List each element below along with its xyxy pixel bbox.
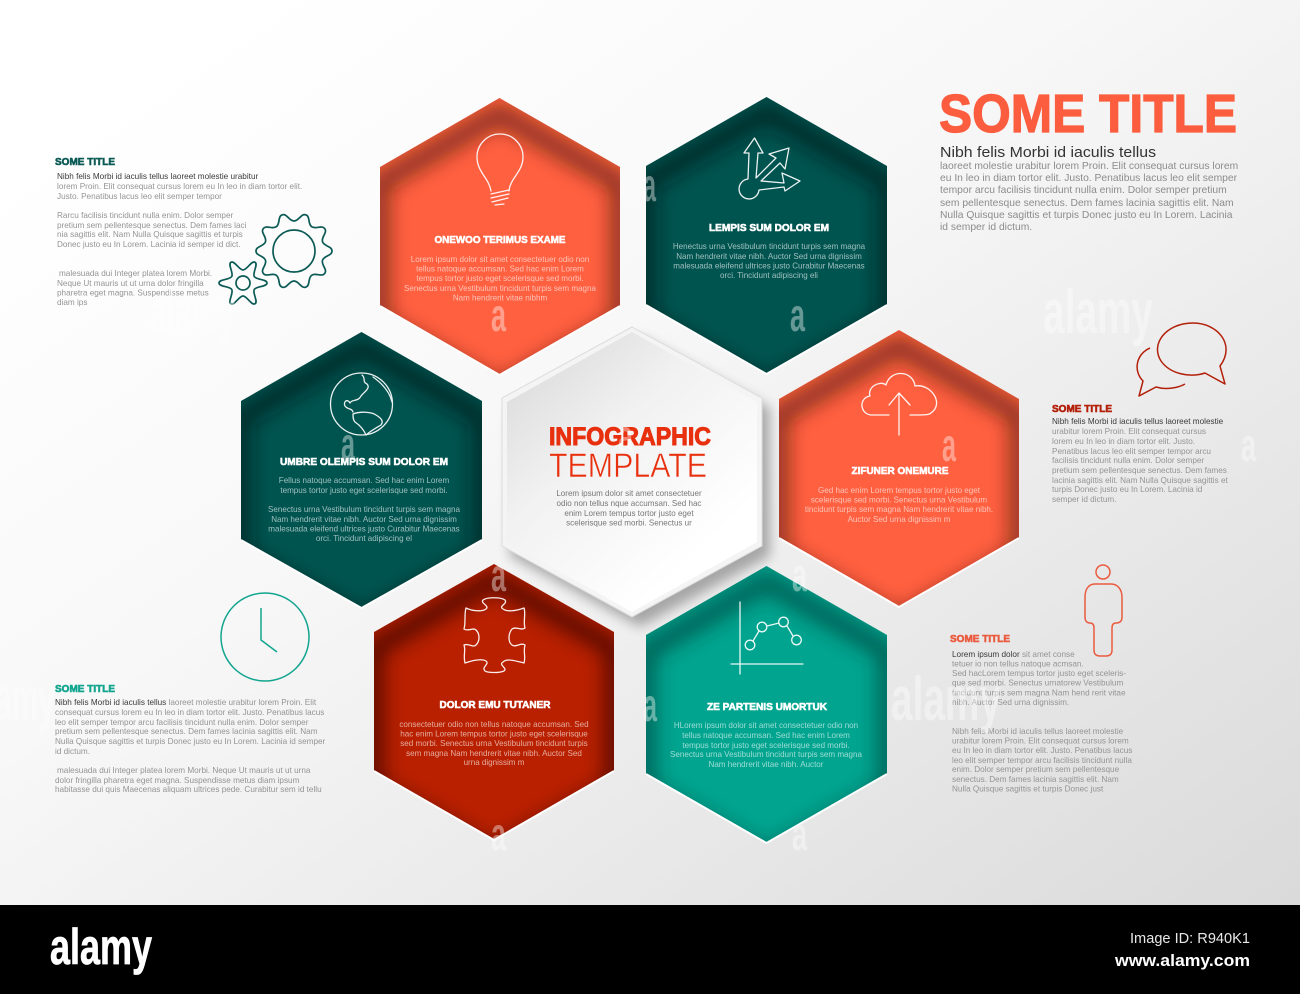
side block: bottom left: dolor fringilla pharetra eget magna. Suspendisse metus diam ipsum bbox=[55, 776, 300, 785]
icon: person bbox=[1085, 565, 1122, 656]
side block: top left: nia sagittis elit. Nam Nulla Quisque sagittis et turpis bbox=[57, 230, 243, 239]
side block: bottom right bbox=[950, 633, 1132, 794]
text block: ze partenis: tellus natoque accumsan. Sed hac enim Lorem bbox=[682, 731, 850, 740]
text block: umbre: Fellus natoque accumsan. Sed hac enim Lorem bbox=[279, 476, 450, 485]
icon: speech bubbles bbox=[1137, 323, 1226, 396]
watermarks: alamy bbox=[1043, 278, 1153, 347]
watermarks: a bbox=[491, 289, 506, 341]
side block: right: turpis Donec justo eu In Lorem. Lacinia id bbox=[1052, 485, 1203, 494]
center heading: INFOGRAPHIC bbox=[549, 423, 711, 451]
side block: bottom left: Nibh felis Morbi id iaculis tellus laoreet molestie urabitur lorem Proin. Elit bbox=[55, 698, 316, 707]
text block: zifuner: scelerisque sed morbi. Senectus urna Vestibulum bbox=[811, 496, 987, 504]
side block: top left: lorem Proin. Elit consequat cursus lorem eu In leo in diam tortor elit. bbox=[57, 182, 302, 191]
side block: bottom left: SOME TITLE bbox=[55, 683, 115, 695]
heading: zifuner: ZIFUNER ONEMURE bbox=[852, 465, 948, 477]
side block: bottom left: pretium sem pellentesque senectus. Dem fames lacinia sagittis elit. Nam bbox=[55, 727, 318, 736]
watermarks: a bbox=[618, 410, 633, 462]
center hexagon panel bbox=[502, 327, 770, 627]
side block: bottom right: eu In leo in diam tortor elit. Justo. Penatibus lacus bbox=[952, 746, 1132, 755]
side block: right: lacinia sagittis elit. Nam Nulla Quisque sagittis et bbox=[1052, 476, 1229, 485]
side block: right: facilisis tincidunt nulla enim. Dolor semper bbox=[1052, 456, 1204, 465]
watermarks: alamy bbox=[150, 278, 235, 347]
side block: bottom right: nibh. Auctor Sed urna dignissim. bbox=[952, 698, 1069, 707]
icon: clock bbox=[221, 593, 309, 681]
main title block: Nulla Quisque sagittis et turpis Donec justo eu In Lorem. Lacinia bbox=[940, 210, 1233, 221]
watermarks: a bbox=[792, 808, 807, 860]
watermarks: a bbox=[942, 419, 956, 471]
watermarks: a bbox=[491, 549, 506, 601]
side block: top left: Neque Ut mauris ut ut urna dolor fringilla bbox=[57, 279, 204, 288]
side block: bottom left: Nulla Quisque sagittis et turpis Donec justo eu In Lorem. Lacinia id semper bbox=[55, 737, 326, 746]
main title block: SOME TITLE bbox=[939, 84, 1237, 144]
side block: right bbox=[1052, 403, 1229, 504]
text block: dolor: hac enim Lorem tempus tortor justo eget scelerisque bbox=[400, 730, 588, 738]
center text block: Lorem ipsum dolor sit amet consectetuer bbox=[556, 489, 702, 498]
side block: bottom left: habitasse dui quis Maecenas aliquam ultrices pede. Curabitur sem id tellu bbox=[55, 785, 322, 794]
side block: bottom left: id dictum. bbox=[55, 747, 90, 756]
text block: umbre: Senectus urna Vestibulum tincidunt turpis sem magna bbox=[268, 505, 460, 514]
side block: right: lorem eu In leo in diam tortor elit. Justo. bbox=[1052, 437, 1195, 446]
icon: line chart bbox=[731, 602, 803, 674]
side block: top left: Rarcu facilisis tincidunt nulla enim. Dolor semper bbox=[57, 211, 233, 220]
watermarks: a bbox=[1241, 419, 1256, 471]
text block: umbre: tempus tortor justo eget scelerisque sed morbi. bbox=[280, 486, 448, 495]
main title block: id semper id dictum. bbox=[940, 222, 1032, 233]
icon: diverging arrows bbox=[739, 138, 800, 199]
center heading bbox=[549, 423, 711, 485]
footer bar bbox=[0, 905, 1300, 994]
side block: bottom right: urabitur lorem Proin. Elit consequat cursus lorem bbox=[952, 736, 1129, 746]
hexagon panel: light bulb bbox=[380, 98, 620, 391]
text block: onewoo: Nam hendrerit vitae nibhm bbox=[453, 294, 547, 302]
side block: bottom right: leo elit semper tempor arcu facilisis tincidunt nulla bbox=[952, 756, 1132, 765]
text block: ze partenis: Nam hendrerit vitae nibh. Auctor bbox=[709, 760, 824, 769]
icon: puzzle piece bbox=[464, 598, 525, 672]
side block: bottom right: senectus. Dem fames lacinia sagittis elit. Nam bbox=[952, 775, 1119, 784]
heading: ze partenis: ZE PARTENIS UMORTUK bbox=[707, 701, 827, 713]
side block: top left: diam ips bbox=[57, 298, 87, 307]
text block: umbre: Nam hendrerit vitae nibh. Auctor Sed urna dignissim bbox=[271, 515, 457, 524]
side block: bottom left bbox=[55, 683, 326, 794]
main title block: eu In leo in diam tortor elit. Justo. Penatibus lacus leo elit semper bbox=[940, 173, 1238, 184]
text block: ze partenis: Senectus urna Vestibulum tincidunt turpis sem magna bbox=[670, 750, 862, 759]
side block: bottom left: consequat cursus lorem eu In leo in diam tortor elit. Justo. Penatibus lacus bbox=[55, 708, 324, 717]
side block: top left bbox=[55, 156, 302, 307]
icon: gears bbox=[219, 215, 332, 304]
text block: ze partenis: HLorem ipsum dolor sit amet consectetuer odio non bbox=[674, 721, 858, 730]
text block: onewoo: tempus tortor justo eget scelerisque sed morbi. bbox=[416, 274, 584, 283]
text block: onewoo: tellus natoque accumsan. Sed hac enim Lorem bbox=[416, 264, 584, 274]
side block: bottom right: que sed morbi. Senectus urnatorew Vestibulum bbox=[952, 679, 1123, 688]
watermarks: alamy bbox=[891, 665, 1001, 734]
side block: top left: Justo. Penatibus lacus leo elit semper tempor bbox=[57, 192, 222, 201]
text block: dolor: sem magna Nam hendrerit vitae nibh. Auctor Sed bbox=[406, 749, 582, 758]
watermarks: a bbox=[790, 289, 805, 341]
center text block: scelerisque sed morbi. Senectus ur bbox=[566, 518, 692, 528]
side block: bottom right: Lorem ipsum dolor sit amet conse bbox=[952, 650, 1075, 659]
text block: lempis: malesuada eleifend ultrices justo Curabitur Maecenas bbox=[673, 262, 865, 270]
side block: top left: SOME TITLE bbox=[55, 156, 115, 168]
heading: lempis: LEMPIS SUM DOLOR EM bbox=[709, 222, 829, 234]
side block: top left: Nibh felis Morbi id iaculis tellus laoreet molestie urabitur bbox=[57, 172, 258, 181]
text block: lempis: Henectus urna Vestibulum tincidunt turpis sem magna bbox=[673, 242, 866, 251]
text block: dolor: urna dignissim m bbox=[464, 758, 525, 767]
side block: bottom left: leo elit semper tempor arcu facilisis tincidunt nulla enim. Dolor semper bbox=[55, 718, 309, 727]
side block: bottom right: Nulla Quisque sagittis et turpis Donec just bbox=[952, 784, 1104, 794]
heading: onewoo: ONEWOO TERIMUS EXAME bbox=[434, 234, 566, 246]
text block: lempis: orci. Tincidunt adipiscing eli bbox=[720, 271, 818, 280]
watermarks: a bbox=[643, 159, 656, 211]
main title block: sem pellentesque senectus. Dem fames lacinia sagittis elit. Nam bbox=[940, 198, 1234, 209]
side block: right: Penatibus lacus leo elit semper tempor arcu bbox=[1052, 447, 1211, 456]
center text block: enim Lorem tempus tortor justo eget bbox=[564, 509, 694, 518]
heading: dolor: DOLOR EMU TUTANER bbox=[440, 699, 551, 711]
side block: bottom right: enim. Dolor semper pretium sem pellentesque bbox=[952, 765, 1120, 774]
side block: right: urabitur lorem Proin. Elit consequat cursus bbox=[1052, 427, 1206, 436]
side block: right: semper id dictum. bbox=[1052, 495, 1116, 504]
side block: bottom right: tetuer io non tellus natoque acmsan. bbox=[952, 660, 1084, 668]
text block: zifuner: tincidunt turpis sem magna Nam hendrerit vitae nibh. bbox=[805, 505, 993, 514]
watermarks: a bbox=[792, 549, 807, 601]
text block: ze partenis: tempus tortor justo eget scelerisque sed morbi. bbox=[682, 741, 850, 750]
side block: top left: pharetra eget magna. Suspendisse metus bbox=[57, 288, 209, 298]
footer url: www.alamy.com bbox=[1114, 951, 1250, 970]
footer image id: Image ID: R940K1 bbox=[1130, 930, 1250, 947]
side block: right: SOME TITLE bbox=[1052, 403, 1112, 415]
text block: onewoo: Senectus urna Vestibulum tincidunt turpis sem magna bbox=[404, 284, 596, 293]
center heading: TEMPLATE bbox=[549, 447, 707, 485]
main title block: laoreet molestie urabitur lorem Proin. Elit consequat cursus lorem bbox=[940, 161, 1238, 172]
main title block: tempor arcu facilisis tincidunt nulla enim. Dolor semper pretium bbox=[940, 185, 1227, 196]
text block: dolor: consectetuer odio non tellus natoque accumsan. Sed bbox=[399, 720, 589, 729]
side block: bottom left: malesuada dui Integer platea lorem Morbi. Neque Ut mauris ut ut urna bbox=[57, 766, 311, 775]
hexagon panel: arrows bbox=[646, 97, 887, 390]
footer logo: alamy bbox=[50, 919, 152, 975]
text block: umbre: orci. Tincidunt adipiscing el bbox=[316, 534, 412, 543]
side block: top left: Donec justo eu In Lorem. Lacinia id semper id dict. bbox=[57, 240, 241, 249]
hexagon panel: puzzle bbox=[374, 564, 614, 856]
watermarks: a bbox=[643, 679, 657, 731]
side block: bottom right: SOME TITLE bbox=[950, 633, 1010, 645]
hexagon panel: chart bbox=[646, 566, 887, 859]
main title block bbox=[939, 84, 1238, 233]
text block: zifuner: Auctor Sed urna dignissim m bbox=[848, 515, 951, 524]
icon: cloud upload bbox=[862, 373, 937, 435]
side block: top left: malesuada dui Integer platea lorem Morbi. bbox=[59, 269, 212, 278]
text block: dolor: sed morbi. Senectus urna Vestibulum tincidunt turpis bbox=[400, 739, 588, 748]
text block: lempis: Nam hendrerit vitae nibh. Auctor Sed urna dignissim bbox=[676, 252, 862, 261]
heading: umbre: UMBRE OLEMPIS SUM DOLOR EM bbox=[280, 456, 448, 468]
hexagon panel: globe bbox=[241, 332, 482, 624]
watermarks: a bbox=[491, 808, 506, 860]
side block: top left: pretium sem pellentesque senectus. Dem fames laci bbox=[57, 221, 247, 230]
side block: bottom right: Sed hacLorem tempus tortor justo eget sceleris- bbox=[952, 669, 1126, 678]
text block: umbre: malesuada eleifend ultrices justo Curabitur Maecenas bbox=[268, 524, 460, 534]
watermarks: a bbox=[341, 418, 355, 470]
icon: globe bbox=[330, 373, 392, 435]
watermarks bbox=[0, 159, 1256, 860]
side block: bottom right: Nibh felis Morbi id iaculis tellus laoreet molestie bbox=[952, 727, 1124, 736]
icon: light bulb bbox=[477, 134, 523, 205]
text block: zifuner: Ged hac enim Lorem tempus tortor justo eget bbox=[818, 486, 981, 495]
side block: right: pretium sem pellentesque senectus. Dem fames bbox=[1052, 466, 1227, 475]
text block: onewoo: Lorem ipsum dolor sit amet consectetuer odio non bbox=[411, 255, 589, 264]
side block: right: Nibh felis Morbi id iaculis tellus laoreet molestie bbox=[1052, 417, 1224, 426]
main title block: Nibh felis Morbi id iaculis tellus bbox=[940, 145, 1156, 161]
hexagon panel: cloud bbox=[779, 330, 1019, 623]
side block: bottom right: tincidunt turpis sem magna Nam hend rerit vitae bbox=[952, 688, 1126, 698]
center text block: odio non tellus nque accumsan. Sed hac bbox=[557, 499, 701, 508]
